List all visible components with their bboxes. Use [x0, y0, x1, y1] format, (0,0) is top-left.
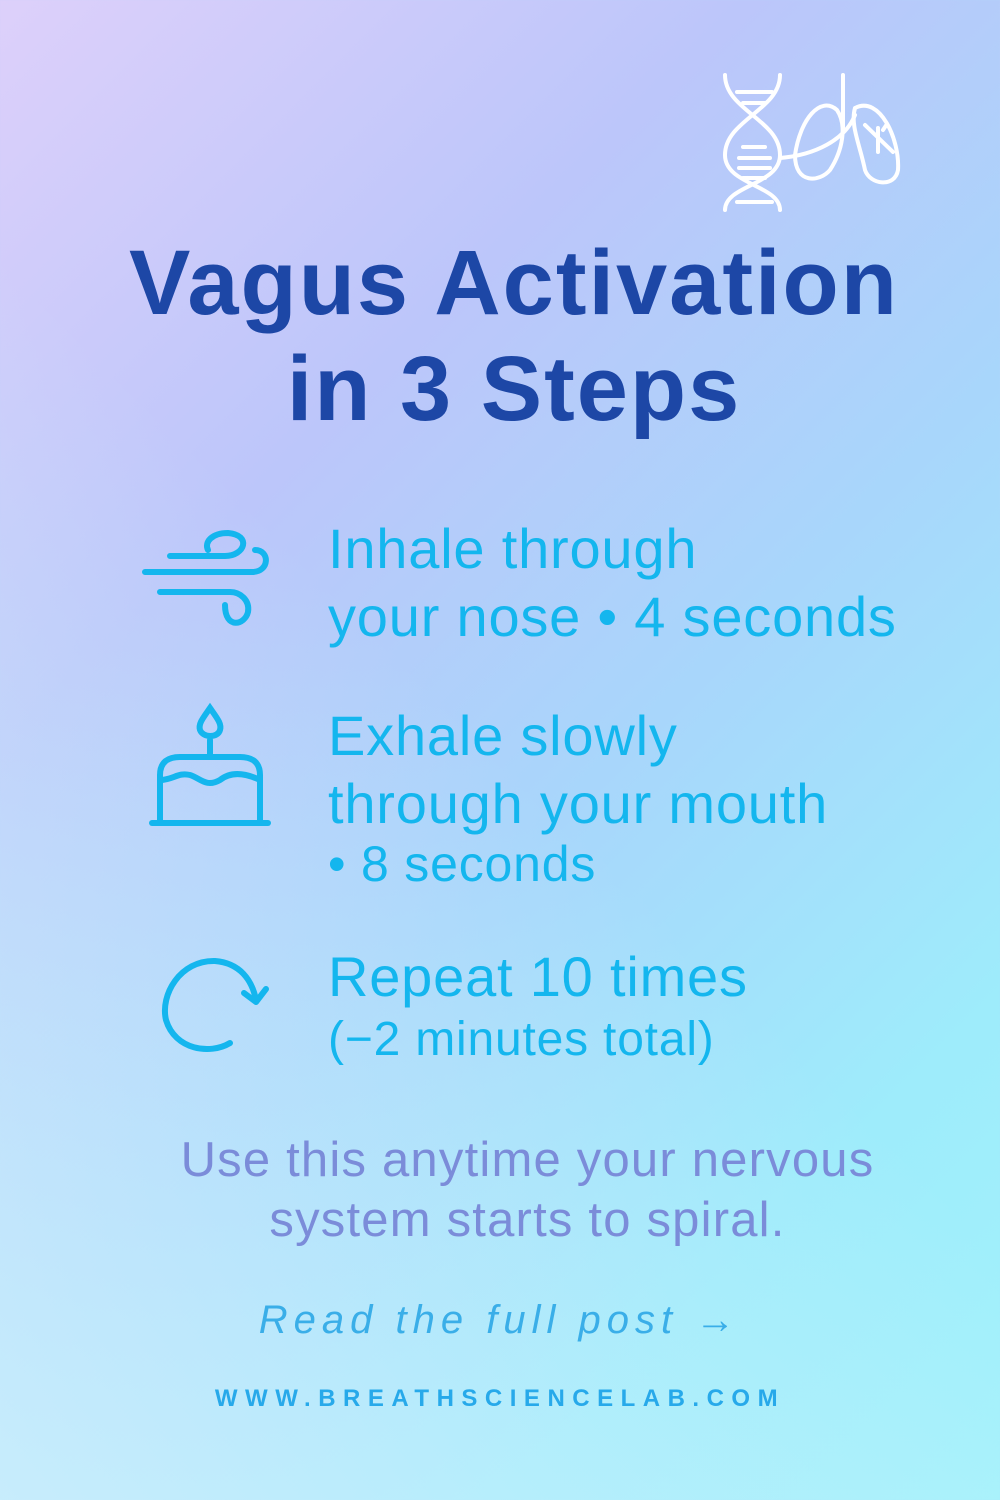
closing note: system starts to spiral. [269, 1193, 786, 1247]
icon: wind [142, 530, 269, 626]
step 1 text [328, 517, 897, 648]
text: • 8 seconds [328, 836, 596, 892]
title: in 3 Steps [287, 338, 741, 440]
closing note: Use this anytime your nervous [181, 1133, 874, 1187]
icon: cake [149, 702, 271, 826]
step 2 [149, 702, 828, 892]
link: read the full post: Read the full post → [259, 1298, 741, 1342]
step 2 text: Exhale slowly [328, 704, 678, 767]
closing note [181, 1133, 874, 1247]
step 2 text: through your mouth [328, 772, 828, 835]
step 1 text: your nose • 4 seconds [328, 585, 897, 648]
step 3 text: Repeat 10 times [328, 945, 748, 1008]
step 1 text: Inhale through [328, 517, 697, 580]
url: WWW.BREATHSCIENCELAB.COM [215, 1385, 785, 1412]
step 2 text [328, 704, 828, 835]
step 3 [162, 945, 748, 1066]
title: Vagus Activation [129, 232, 899, 334]
step 1 [142, 517, 897, 648]
title [129, 232, 899, 440]
icon: dna and lungs [723, 73, 900, 212]
icon: repeat [162, 958, 269, 1052]
text: (−2 minutes total) [328, 1013, 715, 1066]
